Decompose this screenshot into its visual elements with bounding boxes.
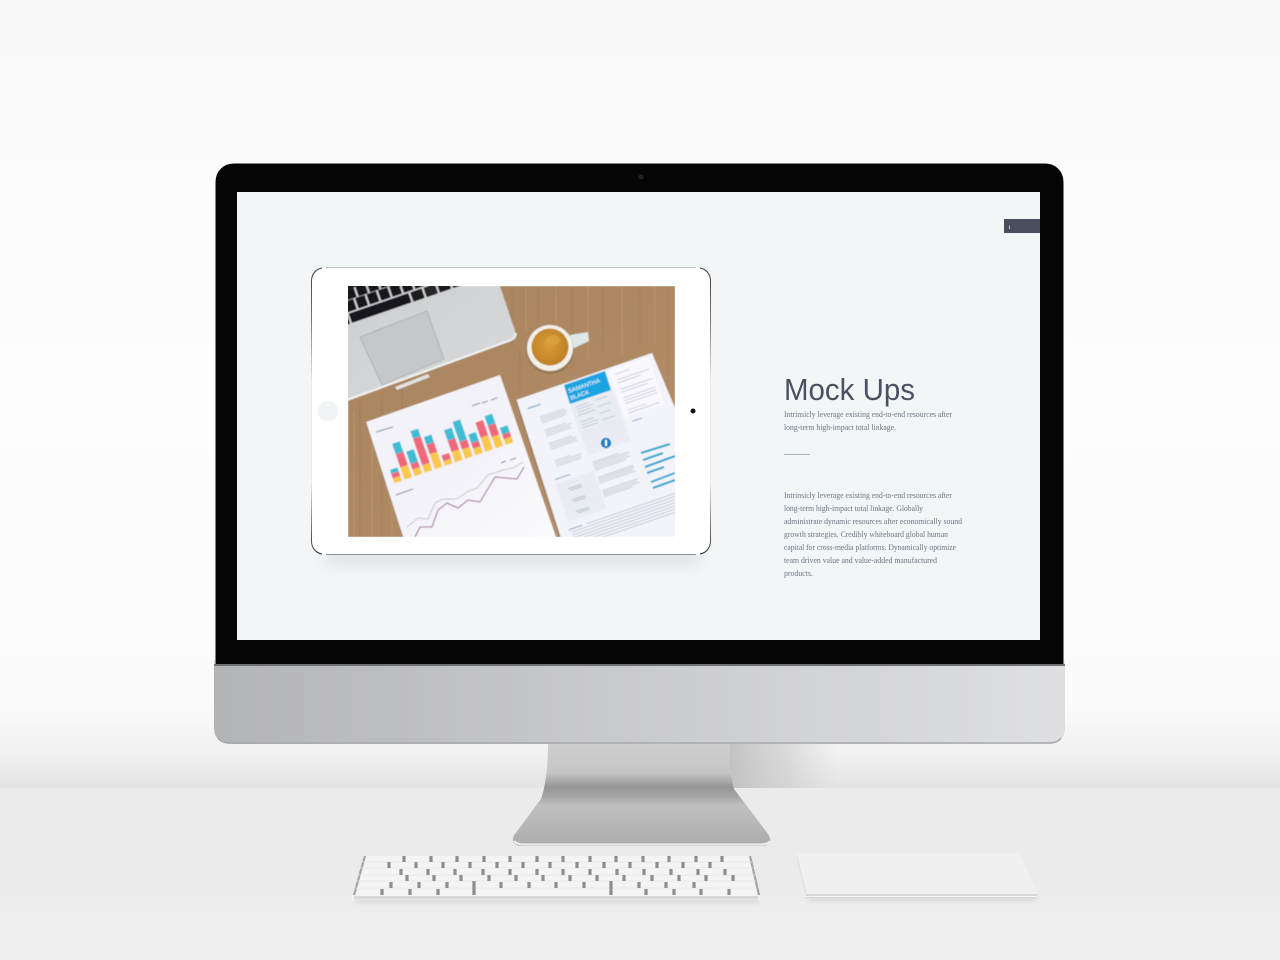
page number tag <box>1004 219 1040 233</box>
body paragraph: capital for cross-media platforms. Dynamically optimize <box>784 542 956 552</box>
wood desk <box>348 286 675 537</box>
tablet mockup <box>312 268 710 564</box>
page number tag: 1 <box>1008 225 1011 231</box>
body paragraph: long-term high-impact total linkage. Globally <box>784 503 924 513</box>
laptop trackpad <box>360 311 444 385</box>
resume badge icon <box>601 438 611 448</box>
chart headings and legend <box>376 398 516 495</box>
body paragraph: administrate dynamic resources after economically sound <box>784 516 963 526</box>
screen <box>237 192 1040 640</box>
keyboard key gaps <box>382 856 733 895</box>
tablet camera <box>690 408 696 414</box>
keyboard <box>352 856 759 903</box>
monitor bezel <box>215 163 1064 665</box>
body paragraph: products. <box>784 568 813 578</box>
resume skill bars <box>641 444 675 488</box>
wall shadow beside stand <box>728 744 838 788</box>
monitor stand <box>513 744 770 846</box>
right resume paper <box>516 352 675 537</box>
body paragraph: team driven value and value-added manufactured <box>784 555 938 565</box>
monitor chin <box>214 660 1065 744</box>
coffee cup <box>526 325 589 374</box>
laptop <box>348 286 518 402</box>
laptop keyboard <box>348 286 462 325</box>
divider <box>784 454 810 455</box>
desk surface <box>0 788 1280 960</box>
right resume paper: SAMANTHA <box>568 378 601 395</box>
tablet edge highlights <box>312 268 710 554</box>
resume content <box>527 368 675 537</box>
body paragraph <box>784 490 963 578</box>
monitor <box>214 163 1065 744</box>
trackpad <box>797 853 1037 901</box>
intro text <box>784 409 952 432</box>
tablet body <box>312 268 710 554</box>
resume name box <box>564 371 611 404</box>
left report paper <box>366 375 556 537</box>
body paragraph: Intrinsicly leverage existing end-to-end resources after <box>784 490 952 500</box>
right resume paper: BLACK <box>570 390 590 402</box>
home button <box>318 401 338 421</box>
bar chart <box>390 413 514 484</box>
heading: Mock Ups: Mock Ups <box>784 373 915 407</box>
webcam <box>638 174 644 180</box>
tablet photo <box>348 286 675 537</box>
intro text: Intrinsicly leverage existing end-to-end resources after <box>784 409 952 419</box>
tablet shadow <box>325 552 700 564</box>
body paragraph: growth strategies. Credibly whiteboard global human <box>784 529 949 539</box>
intro text: long-term high-impact total linkage. <box>784 422 896 432</box>
line chart <box>407 462 524 537</box>
